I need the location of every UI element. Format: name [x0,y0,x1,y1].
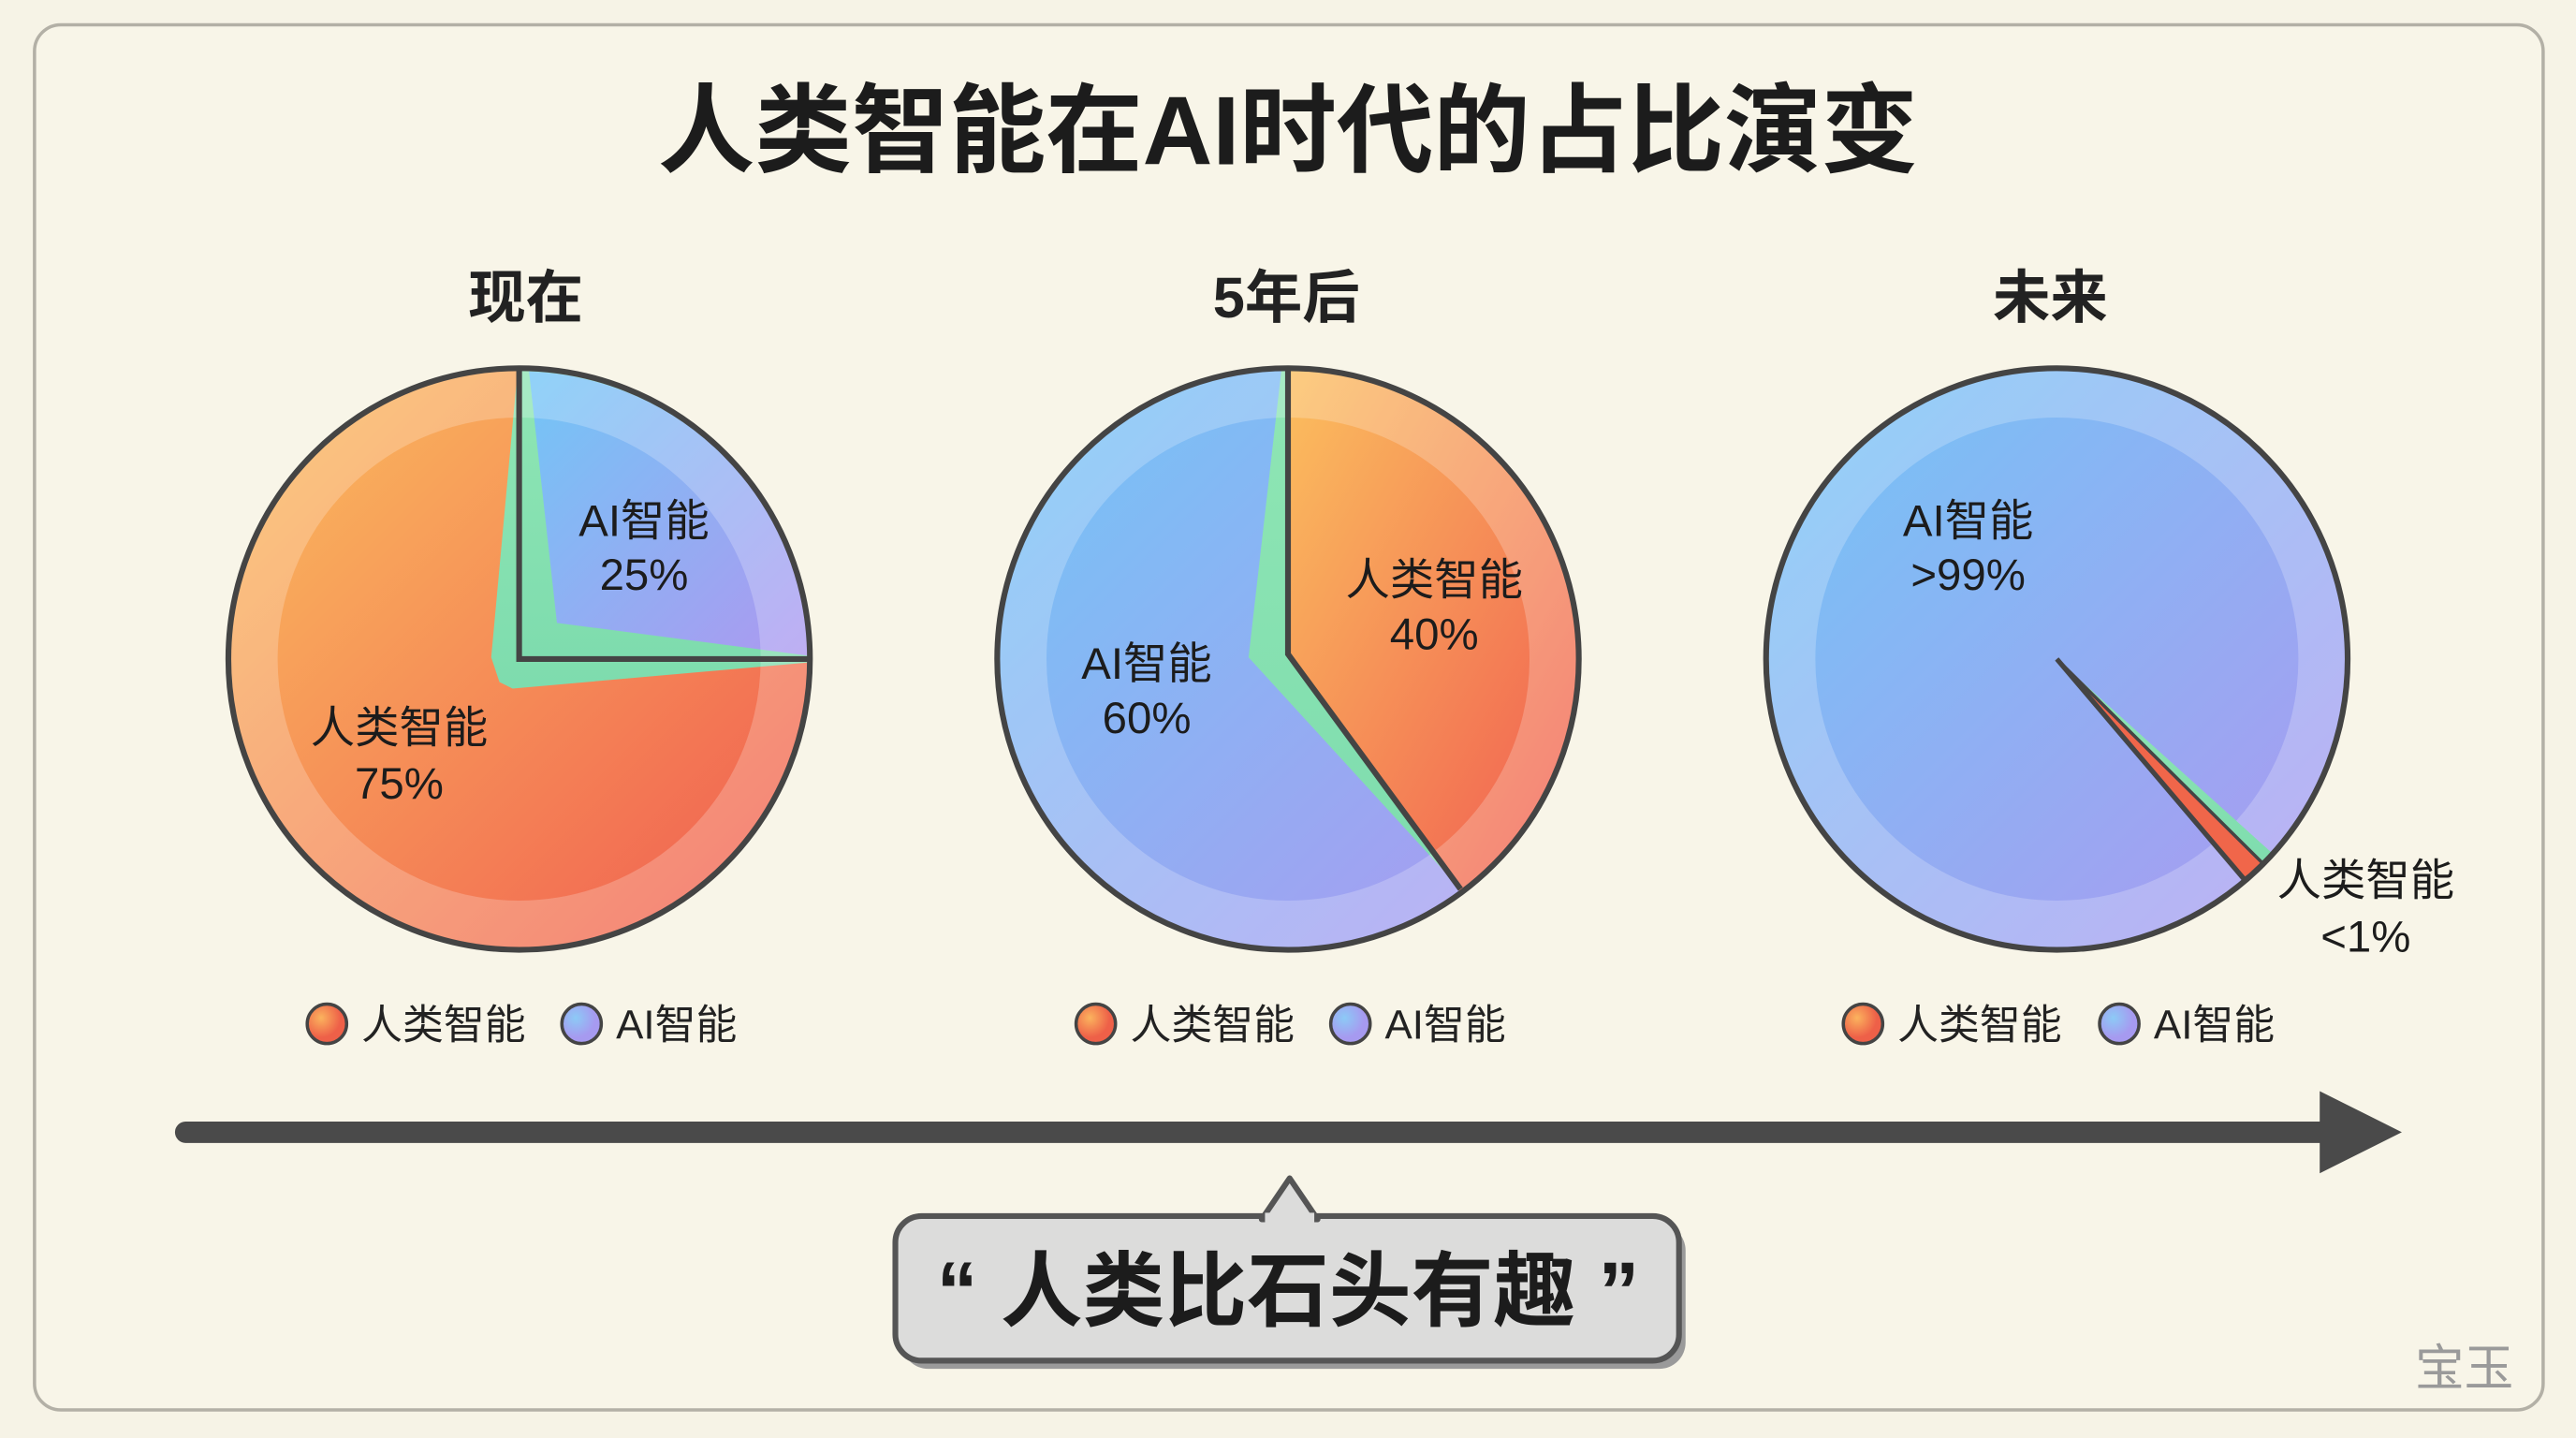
legend: 5 years: 人类智能 [1131,1002,1295,1048]
pie chart: now [228,368,810,950]
legend: future: AI智能 [2154,1002,2275,1048]
title: 人类智能在AI时代的占比演变 [658,77,1918,185]
pie chart: future: >99% [1910,550,2026,600]
pie chart: future: 人类智能 [2277,857,2454,906]
panel: now [228,266,810,1048]
pie chart: now: 75% [355,759,444,809]
legend: now: AI智能 [616,1002,737,1048]
pie chart: future: AI智能 [1903,496,2033,546]
pie chart: future: <1% [2320,912,2410,961]
legend: 5 years: AI智能 [1385,1002,1506,1048]
panel: future [1766,266,2454,1048]
callout: quote: “ 人类比石头有趣 ” [937,1245,1639,1337]
legend: future [1843,1002,2275,1048]
legend: now: 人类智能 [361,1002,526,1048]
heading: 5 years: 5年后 [1213,266,1360,330]
heading: now: 现在 [468,266,583,330]
arrow: timeline [185,1092,2402,1173]
legend: now [307,1002,737,1048]
pie chart: now: 25% [600,550,688,600]
watermark: 宝玉 [2415,1342,2513,1397]
pie chart: 5 years: 40% [1390,609,1479,659]
panel: 5 years [997,266,1579,1048]
callout: quote [896,1179,1686,1369]
pie chart: 5 years: 人类智能 [1345,555,1523,605]
legend: 5 years [1076,1002,1506,1048]
pie chart: now: 人类智能 [311,703,488,753]
pie chart: 5 years: 60% [1103,694,1191,743]
legend: future: 人类智能 [1897,1002,2062,1048]
heading: future: 未来 [1993,266,2108,330]
pie chart: 5 years: AI智能 [1081,639,1212,689]
pie chart: now: AI智能 [578,496,710,546]
pie chart: 5 years [997,368,1579,950]
pie chart: future [1766,368,2454,961]
